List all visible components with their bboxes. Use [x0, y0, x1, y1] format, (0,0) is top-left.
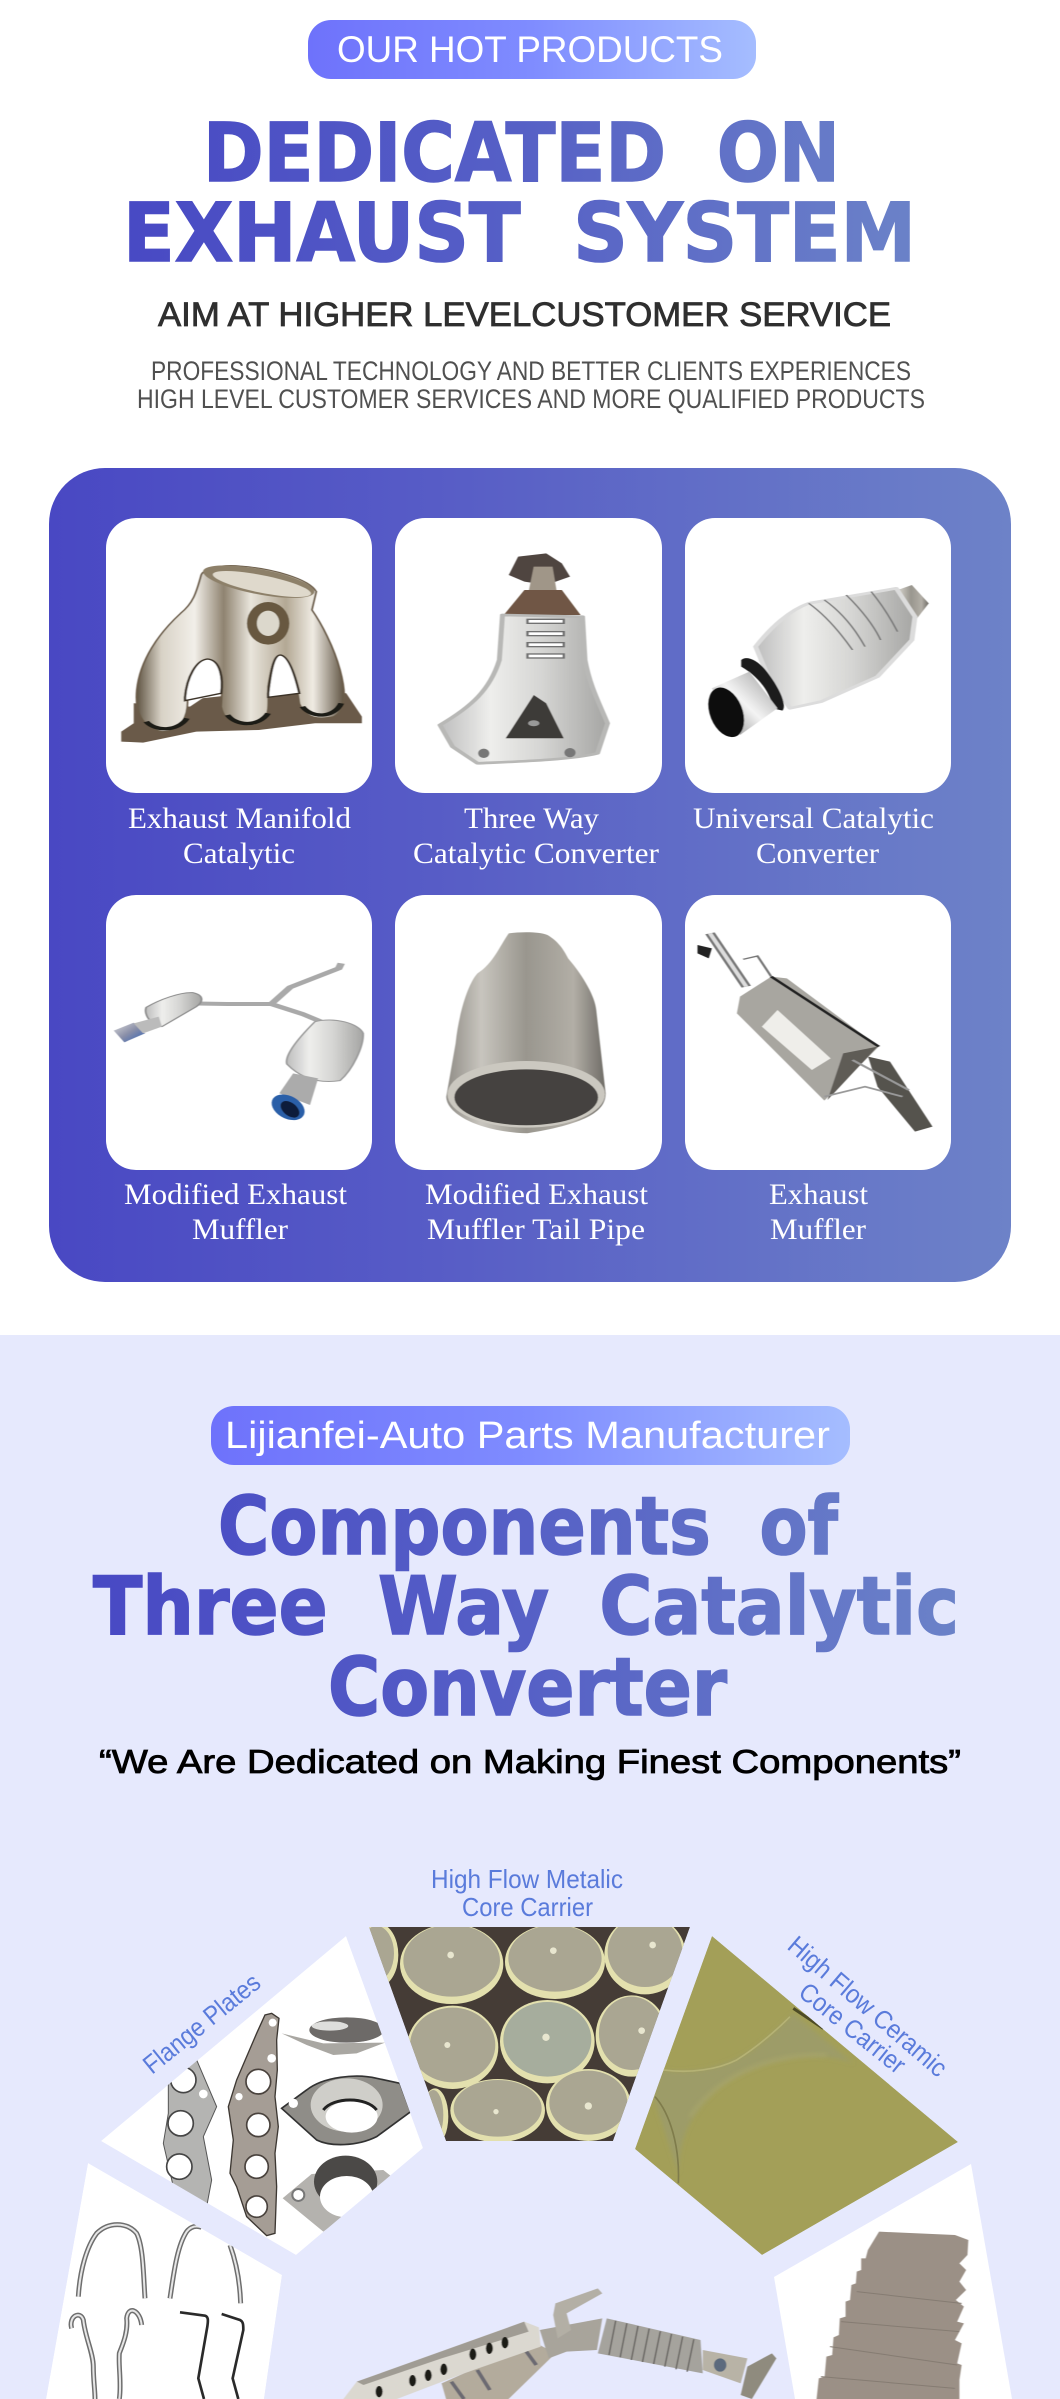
label: Universal Catalytic: [693, 802, 934, 835]
flange: oval: [282, 2076, 411, 2145]
part: heat shield: [343, 2322, 541, 2399]
flange: bottom: [283, 2156, 392, 2232]
description text: [137, 356, 925, 414]
section: our hot products: [0, 0, 1060, 1335]
section: components: [0, 1335, 1060, 2399]
badge: our hot products: OUR HOT PRODUCTS: [337, 29, 723, 70]
part: connector pipe: [540, 2318, 602, 2358]
heading: components of three way catalytic converter: [93, 1480, 959, 1734]
badge: manufacturer: [211, 1406, 850, 1465]
icon: assembled catalytic converter: [343, 2288, 776, 2399]
badge: our hot products: [308, 20, 756, 79]
label: Catalytic: [183, 837, 295, 870]
plate: middle manifold flange: [228, 2013, 279, 2236]
heading: components of three way catalytic converter: Three Way Catalytic: [93, 1560, 959, 1653]
label: [693, 802, 934, 870]
icon: three way converter: [440, 553, 608, 763]
panel: product grid: [49, 468, 1011, 1282]
part: oxygen sensor: [553, 2288, 602, 2338]
label: Converter: [756, 837, 879, 870]
panel: metallic core carrier: [358, 1916, 690, 2145]
product card: three way catalytic converter: [395, 518, 662, 870]
subheading: AIM AT HIGHER LEVELCUSTOMER SERVICE: [158, 296, 891, 334]
label: Muffler: [770, 1213, 866, 1246]
label: high flow metalic core carrier: [431, 1864, 623, 1922]
heading: components of three way catalytic converter: Converter: [328, 1641, 727, 1734]
part: outlet pipe: [703, 2350, 747, 2383]
product card: modified exhaust muffler: [106, 895, 372, 1246]
label: Exhaust Manifold: [128, 802, 351, 835]
part: lower housing: [442, 2345, 555, 2399]
label: [769, 1178, 869, 1246]
panel: brackets and hangers: [46, 2163, 282, 2399]
part: flex pipe: [598, 2318, 703, 2373]
heading: dedicated on exhaust system: [123, 107, 916, 281]
label: [413, 802, 659, 870]
heading: dedicated on exhaust system: EXHAUST SYSTEM: [123, 187, 916, 281]
panel: flange plates: [101, 1936, 423, 2255]
icon: modified exhaust muffler: [114, 963, 363, 1123]
icon: exhaust manifold: [121, 559, 362, 743]
label: Three Way: [464, 802, 599, 835]
panel: ceramic core carrier: [635, 1936, 958, 2255]
label: high flow ceramic core carrier: High Flow Ceramic: [782, 1930, 953, 2083]
part: bands: [451, 2352, 536, 2399]
product card: universal catalytic converter: [685, 518, 951, 870]
plate: left manifold flange: [163, 2060, 217, 2207]
label: Modified Exhaust: [124, 1178, 348, 1211]
label: flange plates: Flange Plates: [137, 1967, 266, 2080]
icon: universal converter: [703, 585, 929, 738]
product card: exhaust manifold: [106, 518, 372, 870]
label: [425, 1178, 649, 1246]
product card: exhaust muffler: [685, 895, 951, 1246]
label: Muffler: [192, 1213, 288, 1246]
description text: PROFESSIONAL TECHNOLOGY AND BETTER CLIENTS EXPERIENCES: [151, 356, 911, 386]
part: outlet flange: [741, 2353, 776, 2399]
label: [128, 802, 351, 870]
icon: exhaust muffler: [698, 933, 932, 1132]
badge: manufacturer: Lijianfei-Auto Parts Manufacturer: [225, 1415, 830, 1457]
description text: HIGH LEVEL CUSTOMER SERVICES AND MORE QUALIFIED PRODUCTS: [137, 384, 925, 414]
label: [124, 1178, 348, 1246]
label: Muffler Tail Pipe: [427, 1213, 645, 1246]
label: high flow metalic core carrier: High Flow Metalic: [431, 1864, 623, 1894]
label: Catalytic Converter: [413, 837, 659, 870]
panel: perforated core strip: [774, 2164, 1012, 2399]
product card: modified exhaust muffler tail pipe: [395, 895, 662, 1246]
heading: components of three way catalytic converter: Components of: [218, 1480, 839, 1573]
label: high flow metalic core carrier: Core Carrier: [462, 1892, 593, 1922]
wires: [71, 2225, 243, 2399]
flange: top: [282, 2017, 385, 2055]
label: Modified Exhaust: [425, 1178, 649, 1211]
heading: dedicated on exhaust system: DEDICATED ON: [203, 107, 840, 201]
icon: tail pipe: [446, 932, 606, 1133]
label: Exhaust: [769, 1178, 869, 1211]
tagline: “We Are Dedicated on Making Finest Components”: [99, 1743, 961, 1780]
label: high flow ceramic core carrier: Core Carrier: [793, 1976, 912, 2080]
